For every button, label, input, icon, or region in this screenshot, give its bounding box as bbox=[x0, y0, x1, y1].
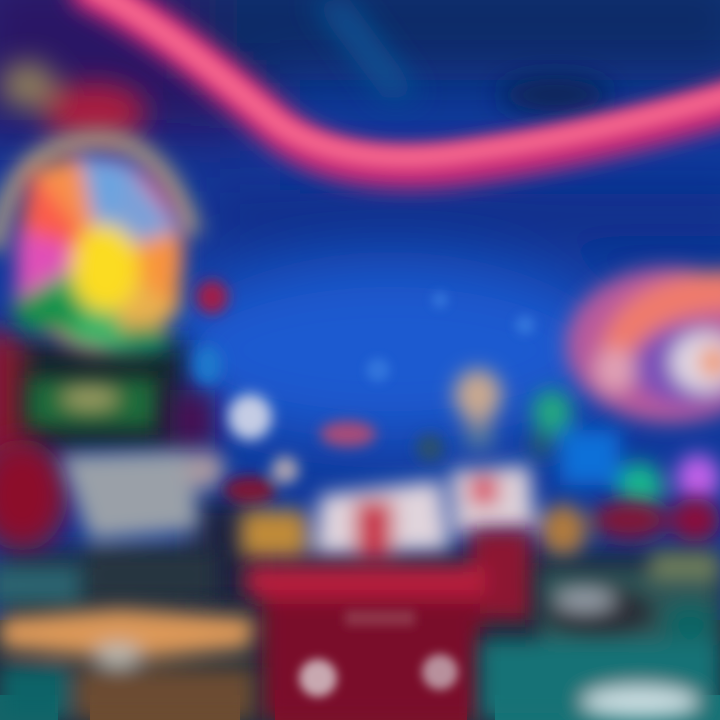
orange wood counter at lower left bbox=[0, 608, 255, 720]
slot machine with colour wheel bbox=[0, 61, 192, 460]
red table with white chip dots bbox=[245, 530, 532, 720]
dark red seat and grey machine base bbox=[0, 390, 225, 605]
red accent and white chips bbox=[194, 280, 444, 504]
colour wheel bbox=[13, 155, 184, 355]
teal table with chips at lower right bbox=[480, 552, 720, 720]
trophy figure and green gem bbox=[454, 369, 720, 514]
ceiling light beams bbox=[310, 0, 610, 111]
small floating lights on the wall bbox=[366, 292, 535, 382]
pink neon ribbon bbox=[90, 0, 720, 168]
slot screen bbox=[28, 378, 158, 428]
neon rainbow sign at right bbox=[566, 267, 720, 423]
poker table front and cards bbox=[240, 465, 720, 560]
